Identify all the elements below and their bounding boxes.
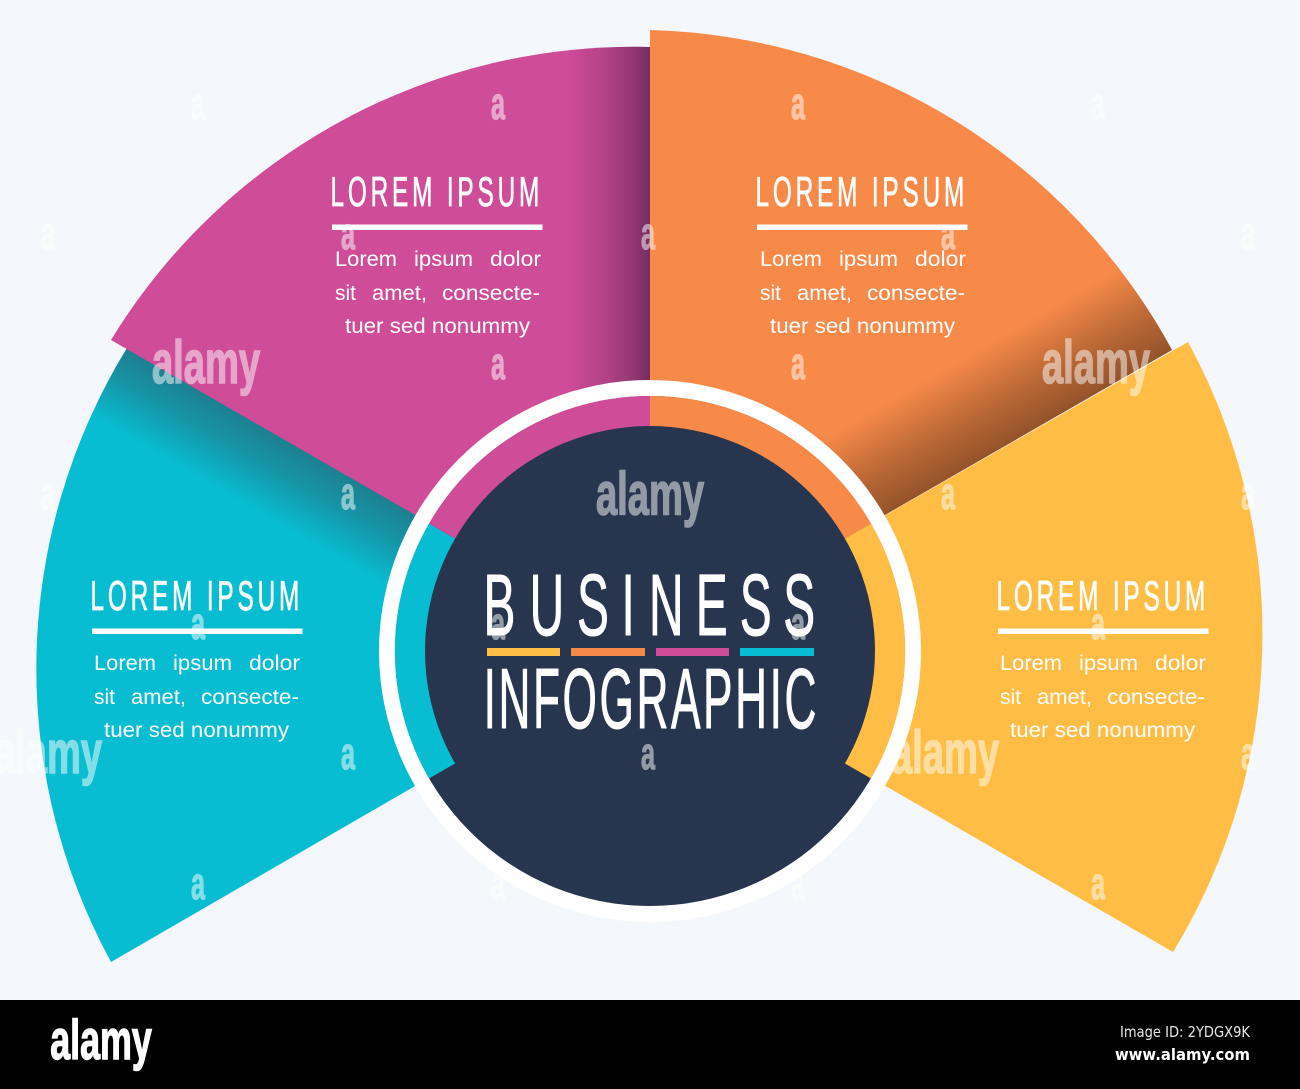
footer bar: Image ID: 2YDGX9K — [1120, 1024, 1251, 1041]
footer bar — [0, 1000, 1300, 1089]
watermark: small repeated marks: a — [791, 858, 806, 909]
text block: cyan: Lorem — [94, 652, 156, 675]
footer bar: alamy — [50, 1008, 152, 1071]
footer bar: www.alamy.com — [1115, 1046, 1250, 1064]
text block: yellow — [996, 573, 1208, 742]
watermark: small repeated marks: a — [341, 468, 355, 519]
watermark: small repeated marks: a — [791, 78, 806, 129]
watermark: small repeated marks: a — [791, 598, 806, 649]
watermark: small repeated marks: a — [491, 338, 506, 389]
title: business: BUSINESS — [483, 556, 815, 654]
panel: orange segment — [650, 30, 1172, 650]
text block: magenta: LOREM IPSUM — [330, 169, 539, 216]
watermark: small repeated marks: a — [491, 858, 506, 909]
watermark: small repeated marks: a — [641, 208, 655, 259]
text block: cyan: ipsum — [173, 652, 232, 675]
watermark: small repeated marks: a — [491, 78, 506, 129]
centre hub — [379, 380, 921, 922]
text block: orange: amet, — [797, 282, 852, 305]
text block: orange: ipsum — [839, 248, 898, 271]
watermark: small repeated marks: a — [941, 208, 956, 259]
watermark: large marks — [0, 329, 1150, 786]
watermark: small repeated marks — [41, 78, 1256, 909]
panel: magenta segment — [111, 47, 650, 650]
text block: orange: Lorem — [760, 248, 822, 271]
text block: cyan: consecte- — [201, 686, 299, 709]
text block: magenta: consecte- — [442, 282, 540, 305]
text block: orange: consecte- — [867, 282, 965, 305]
colour bars — [487, 648, 814, 656]
watermark: large marks: alamy — [596, 461, 704, 528]
text block: orange: dolor — [915, 248, 966, 271]
watermark: small repeated marks: a — [1091, 598, 1105, 649]
watermark: small repeated marks: a — [941, 468, 956, 519]
text block: yellow: Lorem — [1000, 652, 1062, 675]
title: infographic: INFOGRAPHIC — [484, 653, 816, 747]
text block: orange — [756, 169, 968, 338]
watermark: small repeated marks: a — [341, 208, 355, 259]
watermark: small repeated marks: a — [41, 208, 55, 259]
text block: magenta: sit — [335, 282, 356, 305]
watermark: small repeated marks: a — [191, 78, 206, 129]
text block: magenta: Lorem — [335, 248, 397, 271]
panel: yellow segment — [650, 342, 1262, 952]
text block: cyan: LOREM IPSUM — [90, 573, 299, 620]
text block: yellow: amet, — [1037, 686, 1092, 709]
watermark: large marks: alamy — [891, 719, 999, 786]
watermark: small repeated marks: a — [1091, 78, 1105, 129]
text block: orange: LOREM IPSUM — [756, 169, 964, 216]
text block: magenta: tuer sed nonummy — [345, 315, 531, 338]
text block: yellow: consecte- — [1107, 686, 1205, 709]
watermark: small repeated marks: a — [641, 728, 655, 779]
watermark: small repeated marks: a — [41, 468, 55, 519]
text block: magenta: ipsum — [414, 248, 473, 271]
watermark: small repeated marks: a — [491, 598, 506, 649]
text block: yellow: sit — [1000, 686, 1021, 709]
watermark: large marks: alamy — [1042, 329, 1150, 396]
text block: yellow: ipsum — [1079, 652, 1138, 675]
watermark: small repeated marks: a — [791, 338, 806, 389]
watermark: large marks: alamy — [152, 329, 260, 396]
text block: cyan — [90, 573, 302, 742]
watermark: small repeated marks: a — [1091, 858, 1105, 909]
watermark: small repeated marks: a — [1241, 728, 1256, 779]
text block: orange: sit — [760, 282, 781, 305]
watermark: small repeated marks: a — [191, 598, 206, 649]
watermark: small repeated marks: a — [191, 858, 206, 909]
panel: cyan segment — [36, 348, 650, 962]
text block: cyan: dolor — [249, 652, 300, 675]
text block: cyan: tuer sed nonummy — [104, 719, 290, 742]
text block: orange: tuer sed nonummy — [770, 315, 956, 338]
text block: cyan: amet, — [131, 686, 186, 709]
text block: magenta: amet, — [372, 282, 427, 305]
text block: magenta: dolor — [490, 248, 541, 271]
watermark: small repeated marks: a — [1241, 468, 1256, 519]
text block: cyan: sit — [94, 686, 115, 709]
text block: magenta — [330, 169, 542, 338]
watermark: small repeated marks: a — [1241, 208, 1256, 259]
watermark: small repeated marks: a — [341, 728, 355, 779]
text block: yellow: dolor — [1155, 652, 1206, 675]
text block: yellow: LOREM IPSUM — [996, 573, 1205, 620]
text block: yellow: tuer sed nonummy — [1010, 719, 1196, 742]
